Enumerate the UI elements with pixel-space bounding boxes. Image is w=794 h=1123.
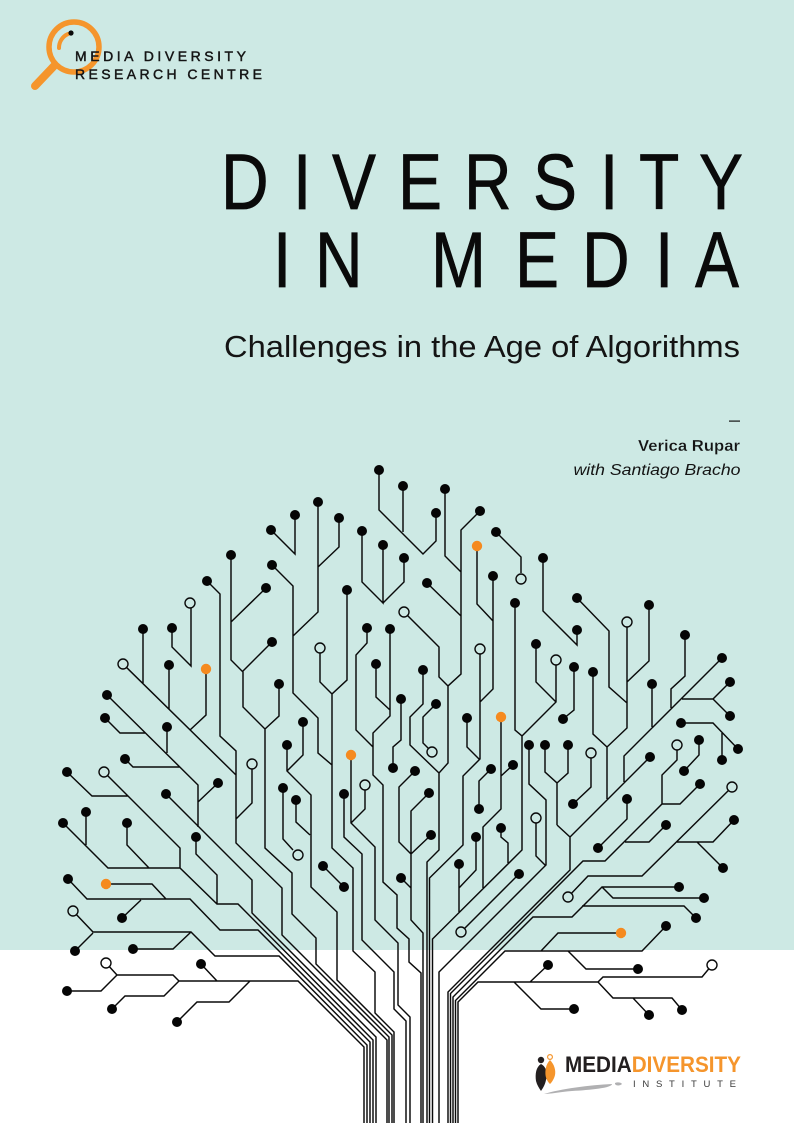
title: IN MEDIA [273, 216, 739, 304]
logo: Media Diversity Research Centre [35, 22, 262, 86]
icon: two figures [536, 1055, 555, 1091]
logo text: RESEARCH CENTRE [75, 66, 262, 82]
tree branches and trunk [323, 470, 556, 1123]
logo text: MEDIA DIVERSITY [75, 48, 247, 64]
swoosh [544, 1082, 622, 1094]
subtitle: Challenges in the Age of Algorithms [224, 329, 740, 364]
orange nodes [101, 541, 626, 938]
INSTITUTE text: INSTITUTE [633, 1079, 736, 1090]
title: DIVERSITY [221, 138, 743, 226]
open ring nodes on white [101, 958, 717, 970]
authors: Verica Rupar [638, 438, 740, 455]
title [221, 138, 743, 304]
icon: magnifying glass [35, 22, 99, 86]
authors: with Santiago Bracho [574, 462, 741, 479]
circuit tree illustration [58, 465, 743, 1123]
wordmark: MEDIADIVERSITY [565, 1052, 741, 1077]
logo text [75, 48, 262, 82]
black leaf nodes [58, 465, 743, 1027]
authors [574, 420, 741, 479]
open ring nodes on mint [68, 574, 737, 937]
logo: Media Diversity Institute [536, 1052, 741, 1094]
